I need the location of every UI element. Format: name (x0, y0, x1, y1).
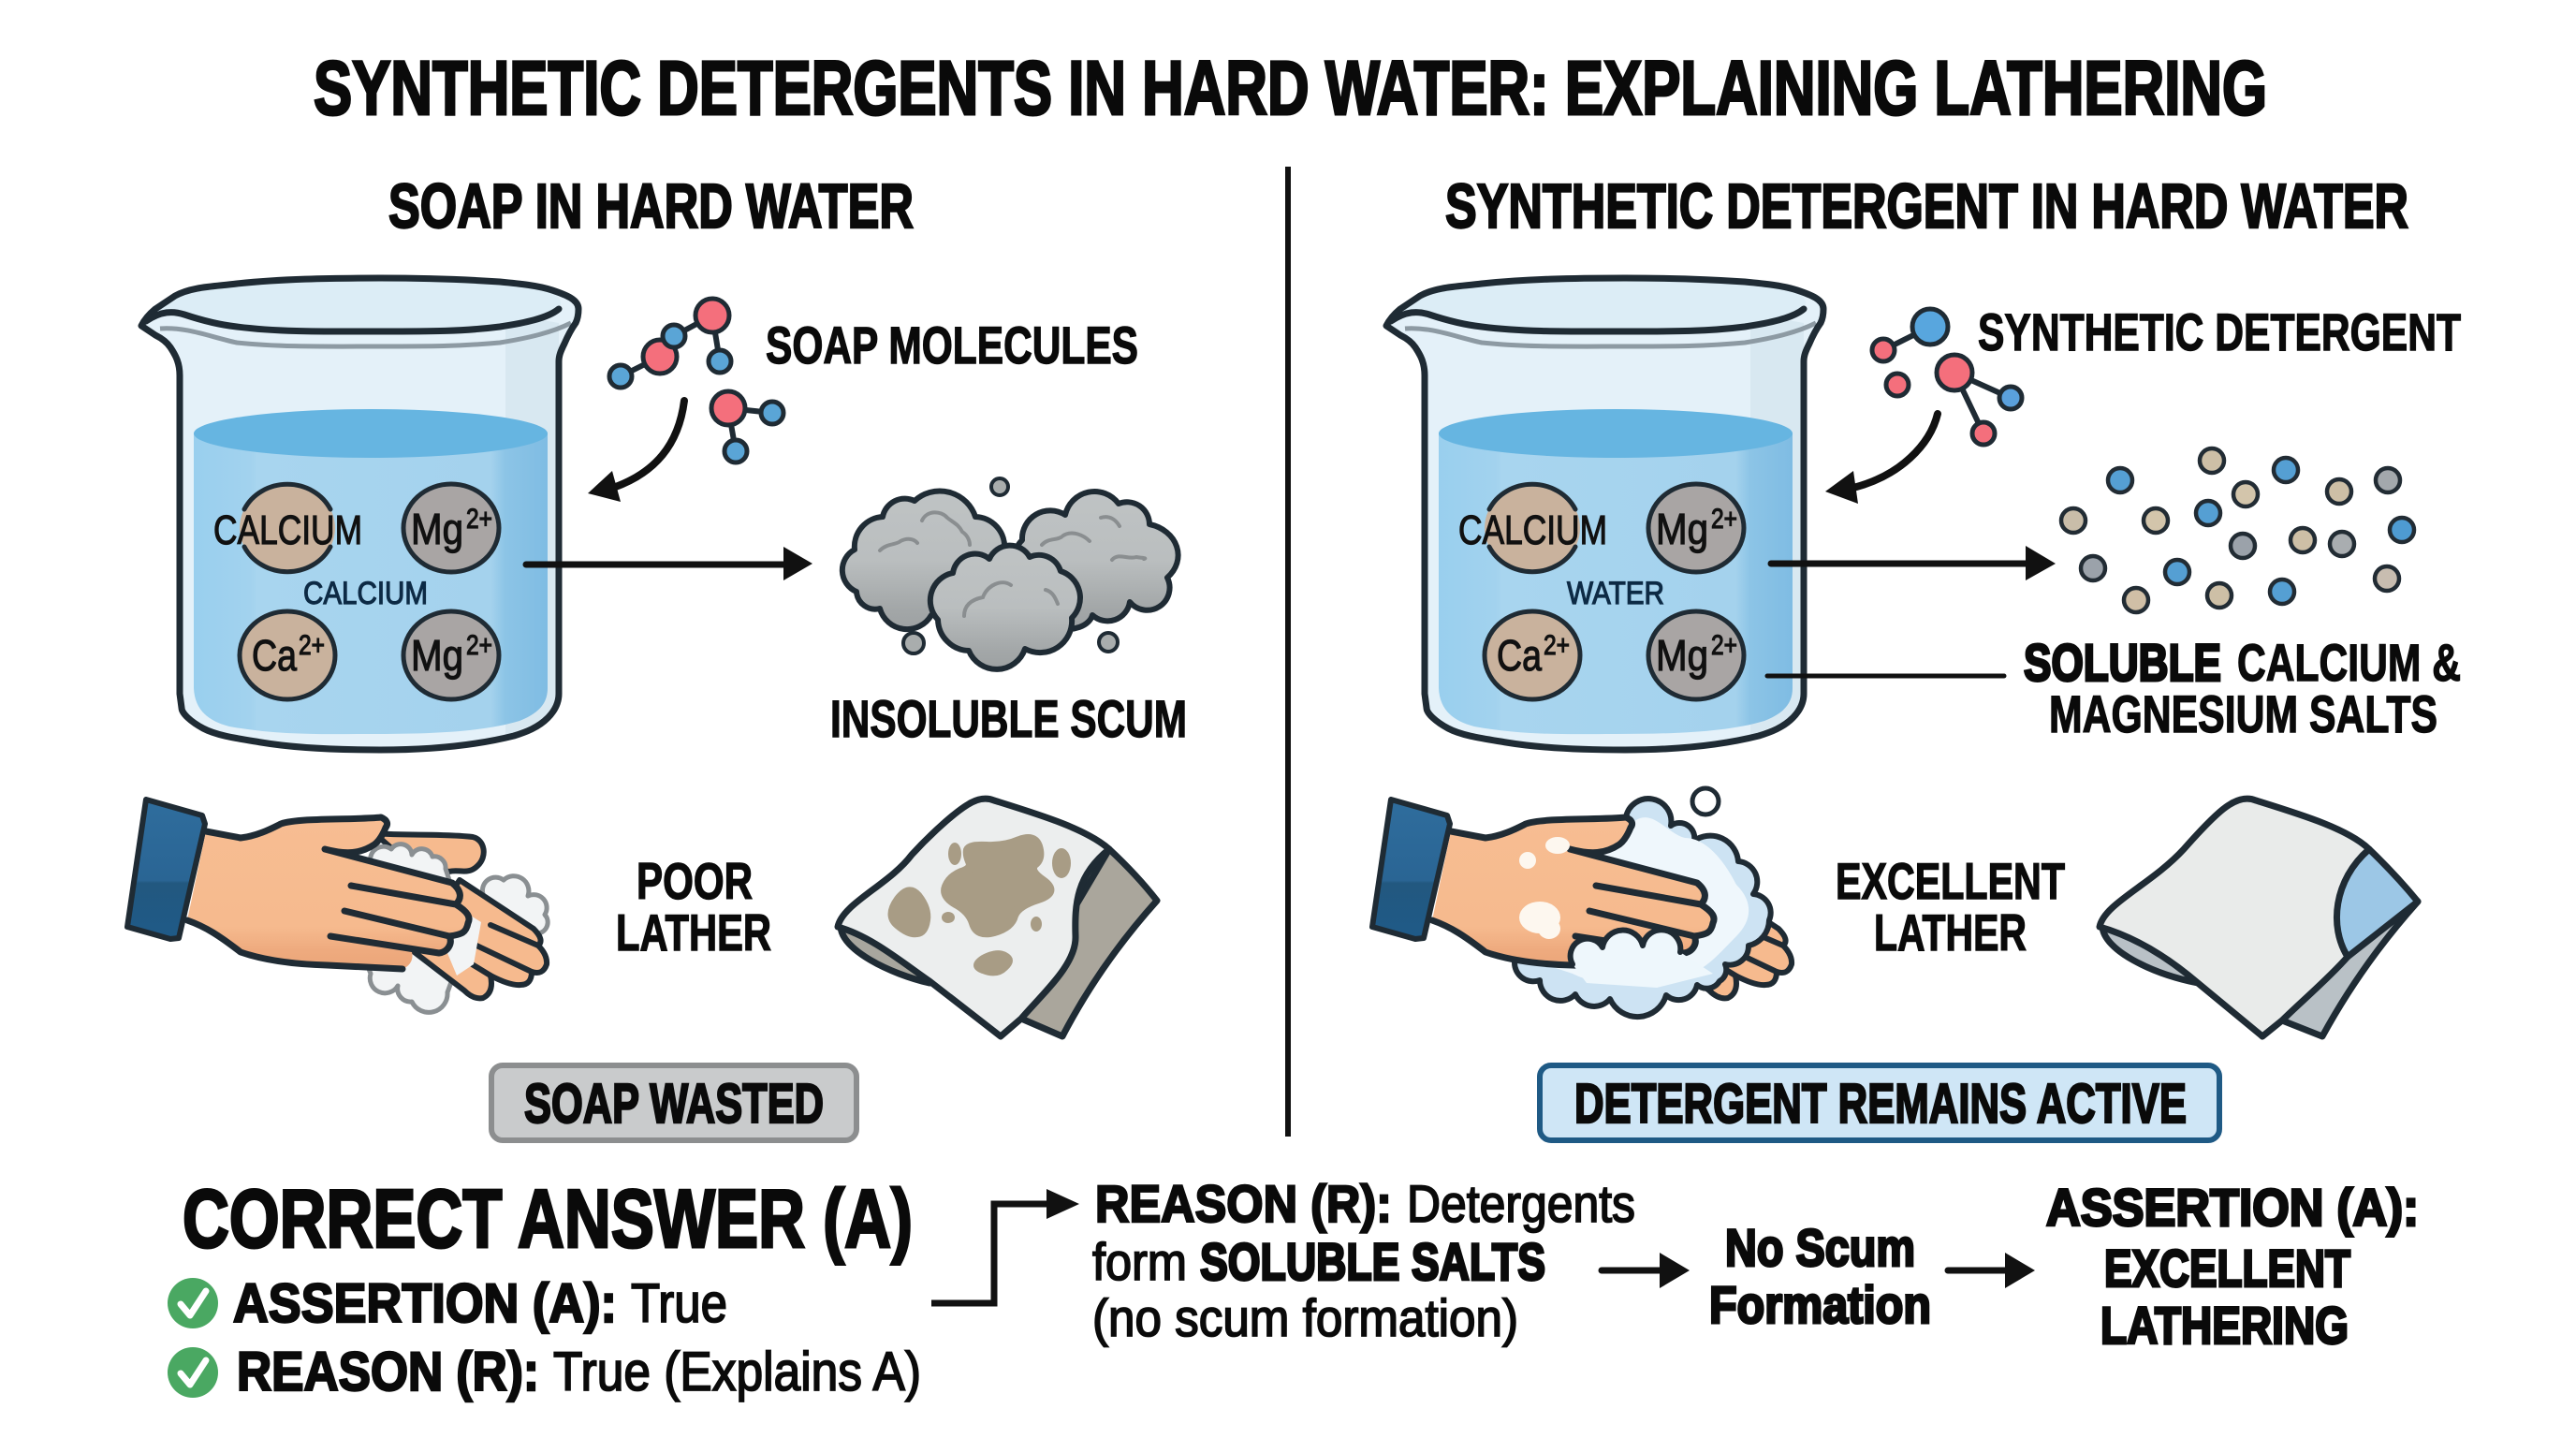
icon: stained cloth (838, 799, 1157, 1036)
arrow: molecules into beaker (588, 401, 684, 502)
icon: soap molecules (609, 299, 783, 462)
label: excellent lather: EXCELLENT (1836, 852, 2065, 910)
icon: clean cloth (2100, 799, 2418, 1036)
arrow: no scum to assertion (1948, 1253, 2035, 1288)
text: reason detail (1092, 1174, 1635, 1347)
icon: scum clouds (842, 478, 1178, 669)
label: soluble calcium and magnesium salts: CALCIUM & (2237, 633, 2461, 692)
label: soluble calcium and magnesium salts: MAGNESIUM SALTS (2049, 684, 2437, 743)
label: soluble calcium and magnesium salts (2024, 633, 2461, 743)
icon: check assertion (168, 1278, 218, 1328)
panel: synthetic detergent in hard water (1372, 278, 2461, 1140)
icon: dispersed soluble salt particles (2061, 448, 2414, 612)
arrow: detergent into beaker (1825, 414, 1938, 504)
badge: detergent remains active (1540, 1065, 2219, 1140)
text: assertion excellent lathering (2046, 1178, 2419, 1355)
badge: soap wasted: SOAP WASTED (524, 1073, 824, 1135)
arrow: elbow to reason (931, 1189, 1079, 1303)
icon: beaker of hard water with detergent: WATER (1567, 576, 1664, 611)
text: reason detail: form (1092, 1232, 1187, 1291)
heading: soap in hard water: SOAP IN HARD WATER (388, 171, 914, 242)
label: poor lather: LATHER (616, 903, 771, 961)
badge: detergent remains active: DETERGENT REMAINS ACTIVE (1574, 1073, 2187, 1135)
text: assertion true: ASSERTION (A): (233, 1273, 617, 1334)
label: poor lather (616, 852, 771, 961)
icon: hand with rich lather (1372, 788, 1792, 1017)
leader line to salts label (1767, 674, 2004, 678)
icon: beaker of hard water (140, 278, 578, 750)
text: no scum formation: Formation (1709, 1275, 1931, 1334)
text: no scum formation (1709, 1218, 1931, 1334)
label: soluble calcium and magnesium salts: SOLUBLE (2024, 633, 2221, 692)
arrow: beaker to soluble salts (1771, 546, 2056, 580)
label: excellent lather (1836, 852, 2065, 961)
icon: detergent molecules (1872, 309, 2022, 445)
text: reason detail: REASON (R): (1095, 1174, 1392, 1233)
text: reason detail: (no scum formation) (1092, 1288, 1518, 1347)
heading: correct answer: CORRECT ANSWER (A) (183, 1172, 913, 1265)
text: assertion excellent lathering: EXCELLENT (2104, 1239, 2350, 1298)
panel: answer summary (168, 1172, 2419, 1402)
arrow: reason to no scum (1602, 1253, 1690, 1288)
text: assertion true: True (631, 1273, 727, 1334)
text: reason detail: Detergents (1407, 1174, 1635, 1233)
panel: soap in hard water (127, 278, 1187, 1140)
center divider (1285, 167, 1291, 1137)
badge: soap wasted (491, 1065, 856, 1140)
text: assertion excellent lathering: ASSERTION (A): (2046, 1178, 2419, 1237)
label: poor lather: POOR (637, 852, 753, 910)
arrow: beaker to scum (526, 547, 812, 580)
text: reason detail: SOLUBLE SALTS (1200, 1232, 1545, 1291)
text: assertion excellent lathering: LATHERING (2100, 1296, 2349, 1355)
icon: beaker of hard water: CALCIUM (303, 576, 428, 611)
icon: hand with poor lather (127, 800, 548, 1012)
label: insoluble scum: INSOLUBLE SCUM (830, 689, 1187, 748)
text: reason true: True (Explains A) (553, 1342, 921, 1402)
icon: beaker of hard water with detergent (1385, 278, 1823, 750)
label: soap molecules: SOAP MOLECULES (766, 315, 1138, 374)
text: no scum formation: No Scum (1725, 1218, 1915, 1277)
text: reason true (237, 1342, 921, 1402)
label: excellent lather: LATHER (1874, 903, 2027, 961)
icon: check reason (168, 1347, 218, 1398)
text: reason true: REASON (R): (237, 1342, 539, 1402)
